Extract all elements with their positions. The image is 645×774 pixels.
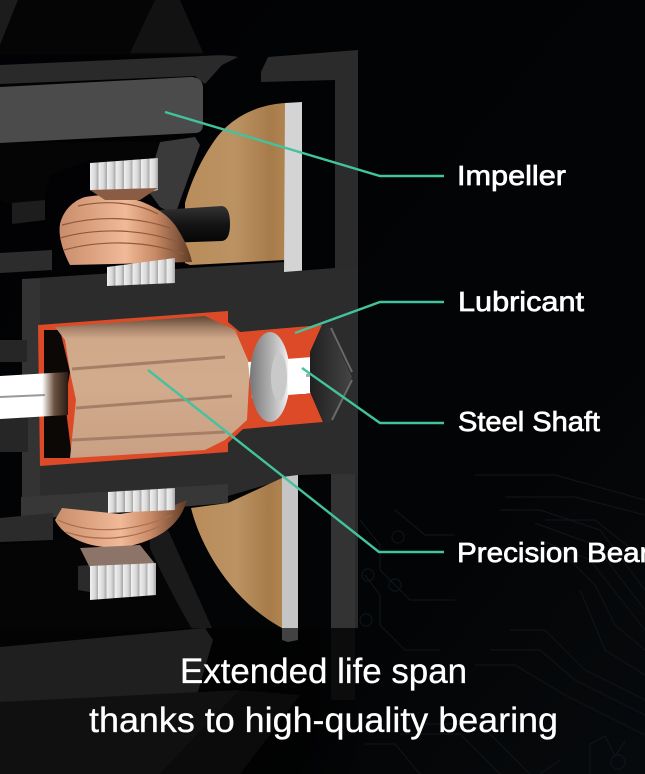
lower tan blade — [191, 478, 282, 628]
circuit board pattern — [360, 475, 645, 774]
red lubricant cavity — [38, 311, 323, 466]
lower left supports — [0, 513, 212, 647]
impeller block — [0, 77, 203, 143]
rotor shadow — [44, 330, 72, 458]
small steel shaft — [248, 357, 317, 398]
lower comb top — [107, 258, 175, 286]
caption heading: Extended life span — [180, 652, 467, 691]
leader line: lubricant — [295, 302, 444, 333]
lower white fin — [282, 475, 298, 628]
caption band — [0, 628, 370, 774]
black rod — [160, 206, 230, 243]
central block — [0, 262, 358, 513]
left steel shaft — [0, 372, 68, 419]
rotor — [55, 316, 250, 458]
upper tan blade — [185, 103, 285, 265]
lower shelf — [21, 484, 228, 520]
bearing washer — [250, 332, 306, 422]
upper comb — [90, 158, 158, 200]
outer frame — [261, 50, 358, 629]
caption heading: thanks to high-quality bearing — [89, 701, 558, 740]
leader line: precision bearing — [148, 370, 444, 552]
leader line: steel shaft — [302, 368, 444, 423]
caption heading — [89, 652, 558, 740]
label: lubricant: Lubricant — [458, 286, 584, 317]
lower comb bottom — [78, 545, 156, 600]
leader line: impeller — [165, 112, 444, 176]
end cap — [310, 325, 352, 423]
upper copper coil — [60, 195, 192, 265]
top cone housing — [0, 0, 238, 84]
label: steel shaft: Steel Shaft — [458, 406, 600, 437]
lower comb top — [108, 488, 175, 513]
upper white fin — [284, 102, 302, 273]
lower copper coil — [55, 500, 187, 548]
upper inner support — [0, 137, 200, 273]
label: impeller: Impeller — [457, 160, 566, 191]
